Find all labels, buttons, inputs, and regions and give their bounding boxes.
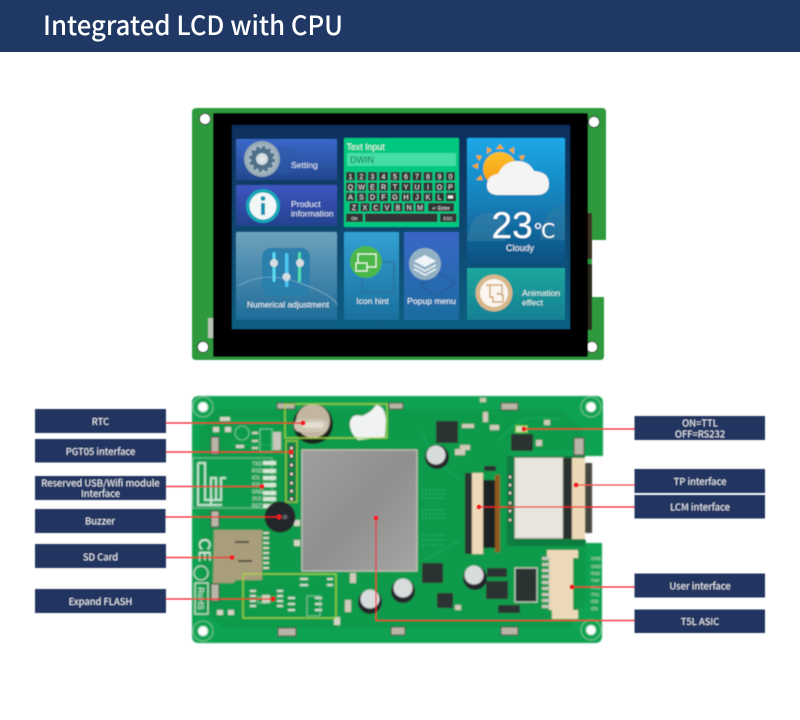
certification marks: CE <box>195 538 214 562</box>
icon: gear <box>244 141 280 177</box>
tile: product information: Product <box>291 199 321 209</box>
USB WiFi antenna module: RST <box>252 504 262 510</box>
USB WiFi antenna module: GND <box>252 490 264 496</box>
tile: animation effect: Animation <box>522 288 560 298</box>
callout: SD Card <box>35 544 234 568</box>
flash area <box>243 574 336 618</box>
left small components <box>213 417 340 625</box>
callout: ON=TTL OFF=RS232: ON=TTL <box>682 416 718 430</box>
keyboard keys: QWERTYUIOP <box>348 184 453 192</box>
tile: product information: information <box>291 208 334 218</box>
LCM FPC connector <box>465 473 500 554</box>
callout: PGT05 interface <box>35 439 294 462</box>
tile: animation effect: effect <box>522 298 543 308</box>
USB WiFi antenna module: TXD <box>252 462 262 468</box>
keyboard keys: ZXCVBNM <box>352 205 423 212</box>
tile: animation effect <box>467 268 565 320</box>
icon: windows <box>350 246 382 278</box>
callout: ON=TTL OFF=RS232 <box>522 416 765 440</box>
TP shield and connector <box>507 456 592 546</box>
keyboard keys: ASDFGHJKL <box>348 195 442 202</box>
keyboard keys <box>346 172 456 222</box>
front view of LCD module <box>35 108 765 643</box>
callout: SD Card: SD Card <box>83 550 118 564</box>
capacitors and inductors <box>345 398 550 614</box>
tile: product information <box>236 185 337 226</box>
icon: info <box>246 189 280 223</box>
callout: User interface: User interface <box>669 578 731 592</box>
keyboard keys: ESC <box>443 216 453 221</box>
user interface connector <box>542 550 602 619</box>
solder tabs <box>211 403 584 636</box>
tile: text input keyboard: Text Input <box>346 142 385 152</box>
RTC battery <box>293 404 333 444</box>
tile: icon hint: Icon hint <box>356 296 389 306</box>
keyboard keys: OK <box>351 216 358 221</box>
user interface connector: RX0 <box>591 571 600 576</box>
callout: Reserved USB/Wifi module interface: Interface <box>81 486 120 500</box>
callout: T5L ASIC: T5L ASIC <box>681 614 719 628</box>
keyboard keys: ↵ Enter <box>432 206 450 212</box>
tile: weather: 23 <box>492 205 533 246</box>
tile: weather: ℃ <box>533 221 555 243</box>
PCB back view <box>192 396 603 643</box>
user interface connector: IO0 <box>591 599 599 604</box>
header banner <box>0 0 800 52</box>
tile: popup menu <box>404 232 459 320</box>
callout: LCM interface: LCM interface <box>670 500 730 514</box>
TTL switch marker <box>516 426 527 432</box>
callout: Buzzer <box>35 509 282 533</box>
PCB traces and vias <box>230 418 560 575</box>
USB WiFi antenna module <box>193 458 276 510</box>
green board front <box>192 108 606 360</box>
USB WiFi antenna module: RXD <box>252 468 263 474</box>
SD card slot <box>213 530 269 583</box>
title: Integrated LCD with CPU <box>43 4 343 43</box>
callout: T5L ASIC <box>374 516 765 633</box>
screen <box>232 125 570 329</box>
user interface connector: GND <box>591 564 602 569</box>
callout: RTC <box>35 409 306 433</box>
certification marks <box>194 538 214 614</box>
callout: LCM interface <box>476 495 765 518</box>
tile: weather <box>467 138 565 264</box>
T5L ASIC metal shield <box>302 450 417 571</box>
user interface connector: IO1 <box>591 606 599 611</box>
user interface connector: TX0 <box>591 578 600 583</box>
tile: icon hint <box>344 232 399 320</box>
glue blob <box>350 405 386 440</box>
callout: TP interface <box>574 469 765 493</box>
callout: Reserved USB/Wifi module interface: Reserved USB/Wifi module <box>41 476 160 490</box>
USB WiFi antenna module: 3V3 <box>252 496 261 502</box>
USB WiFi antenna module: IO2 <box>252 482 260 488</box>
callout: Expand FLASH: Expand FLASH <box>69 594 132 608</box>
black LCD bezel <box>213 113 588 357</box>
green board back <box>192 396 603 643</box>
tile: popup menu: Popup menu <box>407 296 456 306</box>
callout: Reserved USB/Wifi module interface <box>35 476 264 500</box>
tile: text input keyboard: DWIN <box>350 155 374 165</box>
tile: text input keyboard <box>344 138 565 320</box>
certification marks: RoHS <box>196 587 206 610</box>
icon: sun and cloud <box>472 144 549 195</box>
mounting holes <box>193 397 601 641</box>
callout: Expand FLASH <box>35 589 276 613</box>
callout: TP interface: TP interface <box>674 474 726 488</box>
buzzer <box>264 502 296 532</box>
PGT05 pin header <box>286 441 297 502</box>
USB WiFi antenna module: IO1 <box>252 476 260 482</box>
icon: sliders <box>262 248 310 296</box>
tile: weather: Cloudy <box>506 243 535 253</box>
icon: layers <box>409 248 441 280</box>
tile: numerical adjustment: Numerical adjustment <box>247 300 330 310</box>
tile: numerical adjustment <box>236 232 337 320</box>
icon: touch <box>476 274 512 312</box>
tile: setting <box>236 139 337 180</box>
user interface connector: TX1 <box>591 592 600 597</box>
callout: Buzzer: Buzzer <box>85 514 115 528</box>
user interface connector: RX1 <box>591 585 600 590</box>
user interface connector: GND <box>591 556 602 561</box>
callout: PGT05 interface: PGT05 interface <box>66 444 135 458</box>
keyboard keys: 1234567890 <box>349 174 453 181</box>
tile: setting: Setting <box>291 160 318 170</box>
callout: ON=TTL OFF=RS232: OFF=RS232 <box>675 426 725 440</box>
callout: RTC: RTC <box>92 414 109 428</box>
callout: User interface <box>570 574 765 598</box>
